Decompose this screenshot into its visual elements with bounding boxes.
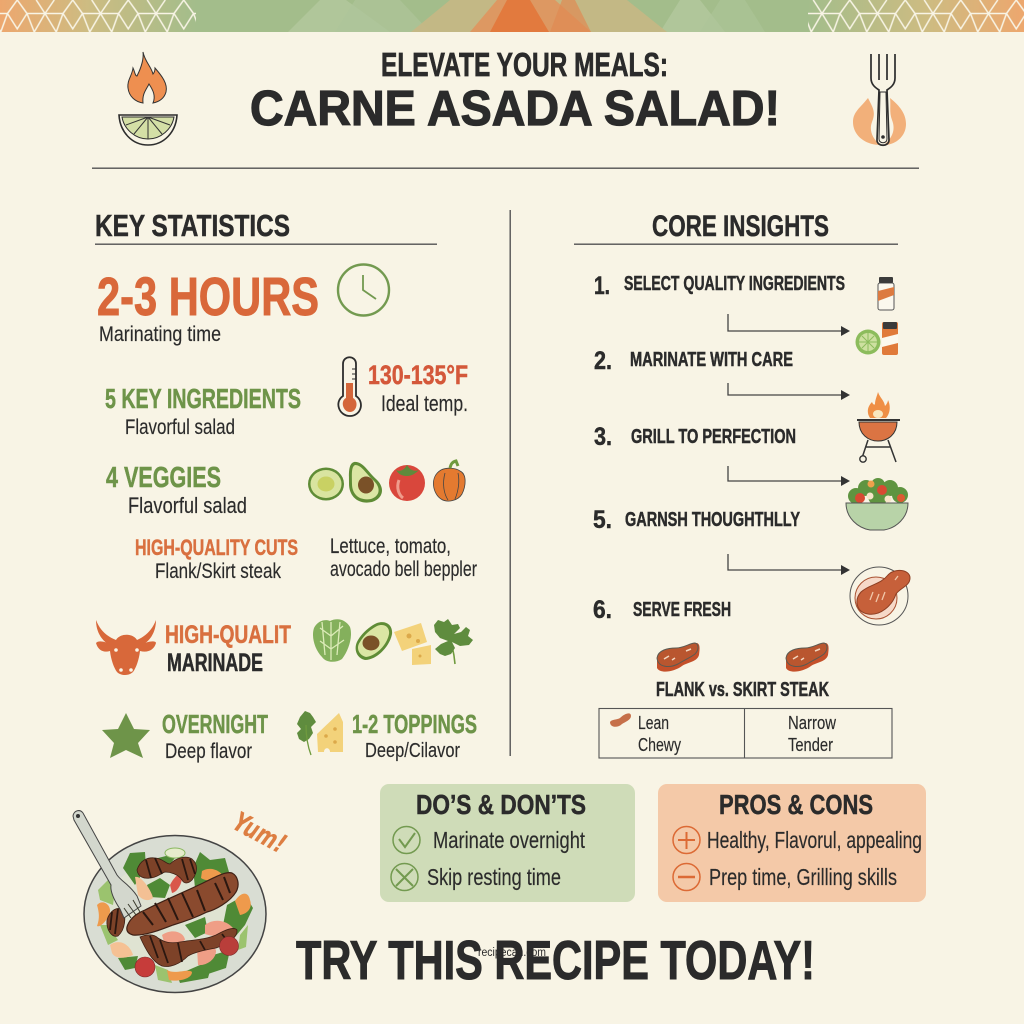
panel: core insights <box>574 210 910 758</box>
heading: key statistics: KEY STATISTICS <box>95 208 290 243</box>
call to action: TRY THIS RECIPE TODAY! <box>296 929 815 991</box>
icon: skirt steak <box>786 643 829 672</box>
arrow 3 <box>728 466 850 486</box>
divider: header rule <box>92 168 919 169</box>
icon: fork over flame <box>853 54 906 145</box>
stat: high-quality cuts: HIGH-QUALITY CUTS <box>135 535 298 560</box>
panel: key statistics <box>95 208 477 763</box>
text: con: Prep time, Grilling skills <box>709 864 897 890</box>
title <box>250 46 780 136</box>
watermark: recipecan.com <box>478 947 546 959</box>
text: veggie list <box>330 535 477 581</box>
title: CARNE ASADA SALAD! <box>250 82 780 136</box>
icon: star <box>102 713 150 758</box>
icon: check <box>393 826 420 854</box>
icon: grill <box>857 392 900 462</box>
stat: high-quality marinade <box>165 621 291 677</box>
step 3: GRILL TO PERFECTION <box>631 426 796 448</box>
step 2 <box>594 347 793 375</box>
text: pro: Healthy, Flavorul, appealing <box>707 827 922 853</box>
text: do: Marinate overnight <box>433 827 585 853</box>
callout: yum: Yum! <box>227 806 291 860</box>
icon: bull head <box>96 620 156 675</box>
stat: high-quality cuts: Flank/Skirt steak <box>155 560 281 583</box>
step 3 <box>594 423 796 451</box>
step 5 <box>593 506 800 534</box>
fork <box>73 811 141 918</box>
text: veggie list: avocado bell beppler <box>330 558 477 581</box>
icon: spice jar <box>878 277 894 310</box>
stat: ideal temp: 130-135°F <box>368 360 468 390</box>
comparison table: Chewy <box>638 734 682 755</box>
stat: high-quality marinade: HIGH-QUALIT <box>165 621 291 649</box>
stat: high-quality cuts <box>135 535 298 583</box>
icons: avocado, tomato and pepper <box>308 461 465 503</box>
text: dont: Skip resting time <box>427 864 561 890</box>
step 1: 1. <box>594 272 610 300</box>
stat: toppings: Deep/Cilavor <box>365 739 460 762</box>
stat: toppings <box>352 709 477 762</box>
step 6 <box>593 596 731 624</box>
icon: flame and lime <box>119 52 177 145</box>
step 6: SERVE FRESH <box>633 599 731 621</box>
heading: pros and cons: PROS & CONS <box>719 789 873 820</box>
panel: dos and donts <box>380 784 635 902</box>
arrow 5 <box>728 554 850 575</box>
header band <box>0 0 1024 32</box>
text: veggie list: Lettuce, tomato, <box>330 535 451 558</box>
stat: marinating time <box>97 267 319 346</box>
icon: clock <box>338 264 389 316</box>
step 1: SELECT QUALITY INGREDIENTS <box>624 273 845 295</box>
comparison heading: FLANK vs. SKIRT STEAK <box>656 678 829 701</box>
step 6: 6. <box>593 596 612 624</box>
icons: lettuce, avocado, cheese and cilantro <box>313 619 473 665</box>
stat: veggies: Flavorful salad <box>128 493 247 518</box>
title: ELEVATE YOUR MEALS: <box>381 46 668 83</box>
comparison table: Narrow <box>788 712 837 733</box>
step 5: GARNSH THOUGHTHLLY <box>625 509 800 531</box>
step 2: MARINATE WITH CARE <box>630 349 793 371</box>
icon: cross <box>391 864 418 890</box>
icon: thermometer <box>338 357 361 416</box>
icon: lime and spice jar <box>856 322 898 355</box>
stat: ideal temp <box>368 360 468 416</box>
stat: key ingredients <box>105 383 301 439</box>
stat: toppings: 1-2 TOPPINGS <box>352 709 477 739</box>
stat: key ingredients: Flavorful salad <box>125 415 235 439</box>
icon: salad bowl <box>846 478 908 530</box>
stat: veggies <box>106 462 247 518</box>
comparison table <box>599 708 892 758</box>
stat: veggies: 4 VEGGIES <box>106 462 221 494</box>
heading: dos and donts: DO’S & DON’TS <box>416 789 586 820</box>
comparison table: Lean <box>638 712 669 733</box>
stat: high-quality marinade: MARINADE <box>167 649 263 677</box>
heading: core insights: CORE INSIGHTS <box>652 210 829 243</box>
stat: marinating time: Marinating time <box>99 323 221 346</box>
heading rule <box>574 244 898 245</box>
stat: key ingredients: 5 KEY INGREDIENTS <box>105 383 301 414</box>
arrow 1 <box>728 314 850 336</box>
arrow 2 <box>728 383 850 400</box>
stat: overnight <box>162 709 268 763</box>
stat: ideal temp: Ideal temp. <box>381 391 468 416</box>
step 1 <box>594 272 845 300</box>
comparison table: Tender <box>788 734 833 755</box>
icon: flank steak <box>657 643 700 672</box>
stat: overnight: OVERNIGHT <box>162 709 268 739</box>
stat: overnight: Deep flavor <box>165 739 252 763</box>
icon: minus <box>673 864 700 890</box>
step 5: 5. <box>593 506 612 534</box>
stat: marinating time: 2-3 HOURS <box>97 267 319 327</box>
step 2: 2. <box>594 347 612 375</box>
icons: cilantro and cheese <box>297 711 343 755</box>
icon: plus <box>673 826 700 854</box>
panel: pros and cons <box>658 784 926 902</box>
illustration: steak salad plate <box>73 811 266 992</box>
divider: column separator <box>510 210 511 756</box>
icon: steak on plate <box>850 567 910 625</box>
step 3: 3. <box>594 423 612 451</box>
heading rule <box>95 244 437 245</box>
